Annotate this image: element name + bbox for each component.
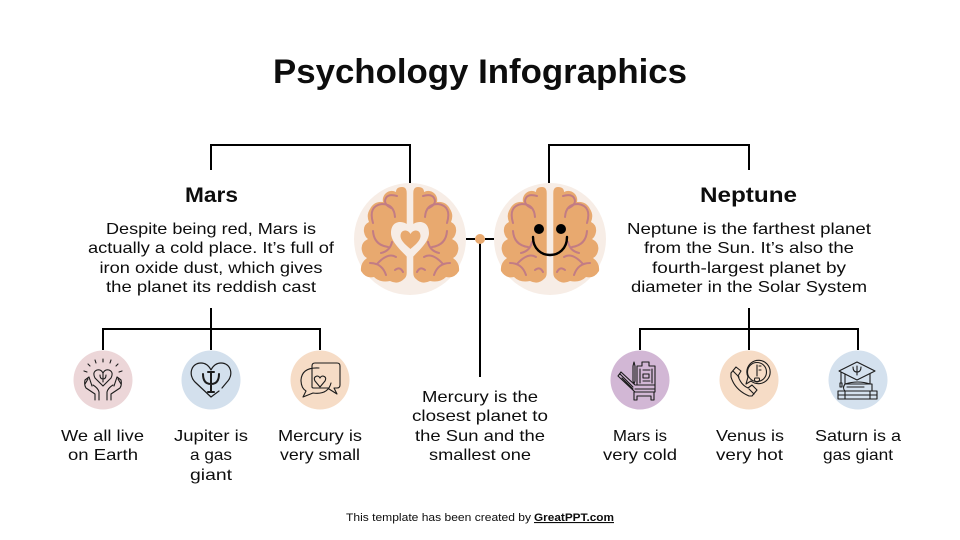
label: We all live on Earth: We all live xyxy=(61,428,144,445)
text: Mercury description: Mercury is the xyxy=(422,389,538,406)
connector: top right bracket xyxy=(549,145,749,183)
connector: left branches xyxy=(103,308,320,350)
connector: top left bracket xyxy=(211,145,410,183)
icon: hands holding heart xyxy=(74,350,132,410)
text: Mercury description xyxy=(412,389,548,464)
icon: therapy couch with clipboard xyxy=(610,350,670,410)
text: Mercury description: smallest one xyxy=(429,447,531,464)
text: Mercury description: closest planet to xyxy=(412,408,548,425)
heading: Mars: Mars xyxy=(185,184,238,207)
label: Mercury is very small xyxy=(278,428,362,464)
footer credit xyxy=(346,512,614,524)
label: Mercury is very small: very small xyxy=(280,447,360,464)
text: Neptune description: from the Sun. It’s also the xyxy=(644,240,854,257)
panel: Mars xyxy=(88,184,335,296)
text: Neptune description xyxy=(627,221,872,296)
footer credit: This template has been created by xyxy=(346,512,532,524)
icon: heart with psi xyxy=(182,350,240,410)
label: Saturn is a gas giant: Saturn is a xyxy=(815,428,901,445)
text: Mercury description: the Sun and the xyxy=(415,428,545,445)
label: Jupiter is a gas giant xyxy=(174,428,248,484)
text: Mars description: actually a cold place. It’s full of xyxy=(88,240,335,257)
label: Saturn is a gas giant: gas giant xyxy=(823,447,894,464)
label: Jupiter is a gas giant: giant xyxy=(190,467,233,484)
icon: brain with heart xyxy=(354,183,466,295)
title: Psychology Infographics xyxy=(273,53,687,91)
text: Mars description: Despite being red, Mars is xyxy=(106,221,316,238)
label: We all live on Earth xyxy=(61,428,144,464)
label: Venus is very hot: Venus is xyxy=(716,428,784,445)
text: Mars description: iron oxide dust, which gives xyxy=(100,260,322,277)
label: Mars is very cold xyxy=(603,428,677,464)
heading: Neptune: Neptune xyxy=(700,184,797,207)
label: Saturn is a gas giant xyxy=(815,428,901,464)
panel: Neptune xyxy=(627,184,872,296)
icon: telephone with thermometer bubble xyxy=(720,350,778,410)
label: Jupiter is a gas giant: Jupiter is xyxy=(174,428,248,445)
label: Venus is very hot xyxy=(716,428,784,464)
label: Mercury is very small: Mercury is xyxy=(278,428,362,445)
connector: right branches xyxy=(640,308,858,350)
text: Neptune description: Neptune is the farthest planet xyxy=(627,221,872,238)
label: Mars is very cold: very cold xyxy=(603,447,677,464)
text: Mars description xyxy=(88,221,335,296)
icon: brain with smile xyxy=(494,183,606,295)
icon: speech bubbles with heart xyxy=(290,350,350,410)
label: Jupiter is a gas giant: a gas xyxy=(190,447,232,464)
connector: centre link and stem xyxy=(466,234,494,377)
label: Mars is very cold: Mars is xyxy=(613,428,667,445)
label: We all live on Earth: on Earth xyxy=(68,447,138,464)
text: Mars description: the planet its reddish cast xyxy=(106,279,317,296)
icon: graduation cap on books xyxy=(828,350,888,410)
text: Neptune description: diameter in the Solar System xyxy=(631,279,867,296)
text: Neptune description: fourth-largest planet by xyxy=(652,260,846,277)
footer credit: GreatPPT.com xyxy=(534,512,614,524)
label: Venus is very hot: very hot xyxy=(716,447,784,464)
